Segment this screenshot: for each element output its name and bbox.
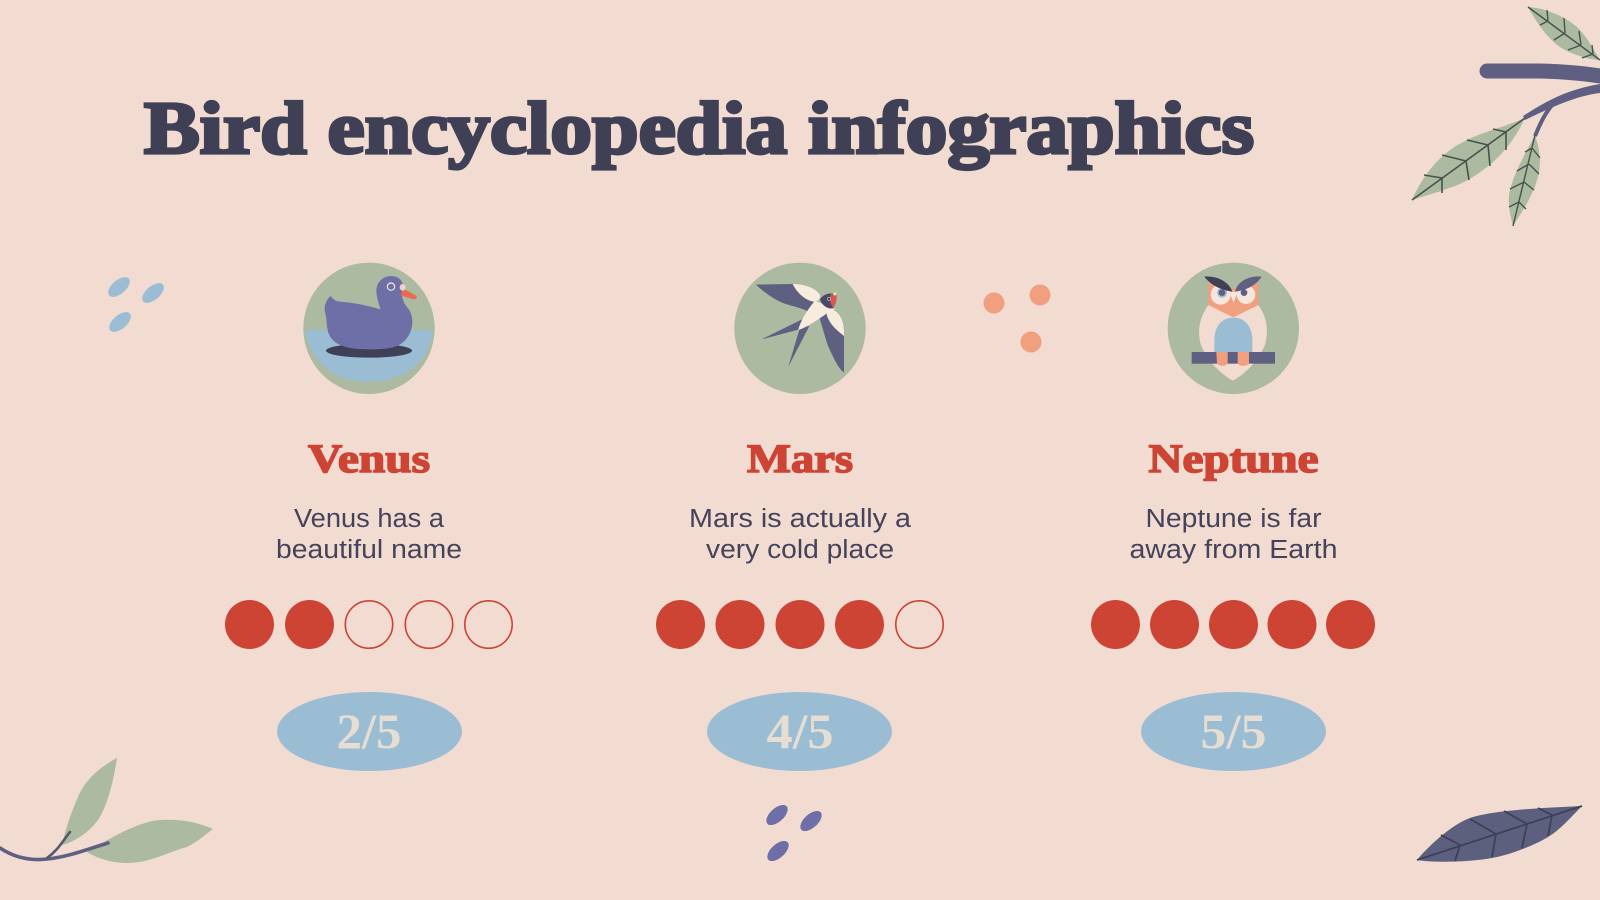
title: Bird encyclopedia infographics (144, 88, 1254, 170)
decoration: bottom right dark leaf (1417, 806, 1582, 862)
heading: Neptune: Neptune (1148, 436, 1318, 481)
badge: 4/5: 4/5 (766, 703, 834, 759)
decoration: bottom left branch with leaves (0, 758, 213, 863)
decoration: top right branch with leaves (1412, 7, 1600, 226)
icon: owl (1168, 263, 1299, 394)
rating dots: 2 of 5 (225, 600, 512, 649)
badge: 4/5 (707, 692, 892, 771)
text: Venus description (276, 505, 462, 564)
heading: Venus: Venus (308, 436, 430, 481)
panel: Venus (225, 263, 512, 771)
text: Mars description (689, 505, 912, 564)
badge: 5/5 (1141, 692, 1326, 771)
rating dots: 5 of 5 (1091, 600, 1375, 649)
decoration: orange dots (984, 284, 1050, 352)
text: Neptune description: away from Earth (1130, 536, 1338, 564)
panel: Neptune (1091, 263, 1375, 771)
badge: 5/5: 5/5 (1200, 703, 1266, 759)
icon: swallow (734, 263, 866, 394)
panel: Mars (656, 263, 943, 771)
text: Mars description: Mars is actually a (689, 505, 912, 533)
badge: 2/5 (277, 692, 462, 771)
text: Neptune description (1130, 505, 1338, 564)
badge: 2/5: 2/5 (336, 703, 402, 759)
text: Mars description: very cold place (706, 536, 894, 564)
text: Venus description: beautiful name (276, 536, 462, 564)
decoration: blue drops (105, 273, 167, 336)
rating dots: 4 of 5 (656, 600, 943, 649)
decoration: purple drops (763, 801, 825, 865)
icon: duck (303, 263, 435, 394)
text: Neptune description: Neptune is far (1146, 505, 1322, 533)
heading: Mars: Mars (747, 436, 853, 481)
text: Venus description: Venus has a (294, 505, 445, 533)
